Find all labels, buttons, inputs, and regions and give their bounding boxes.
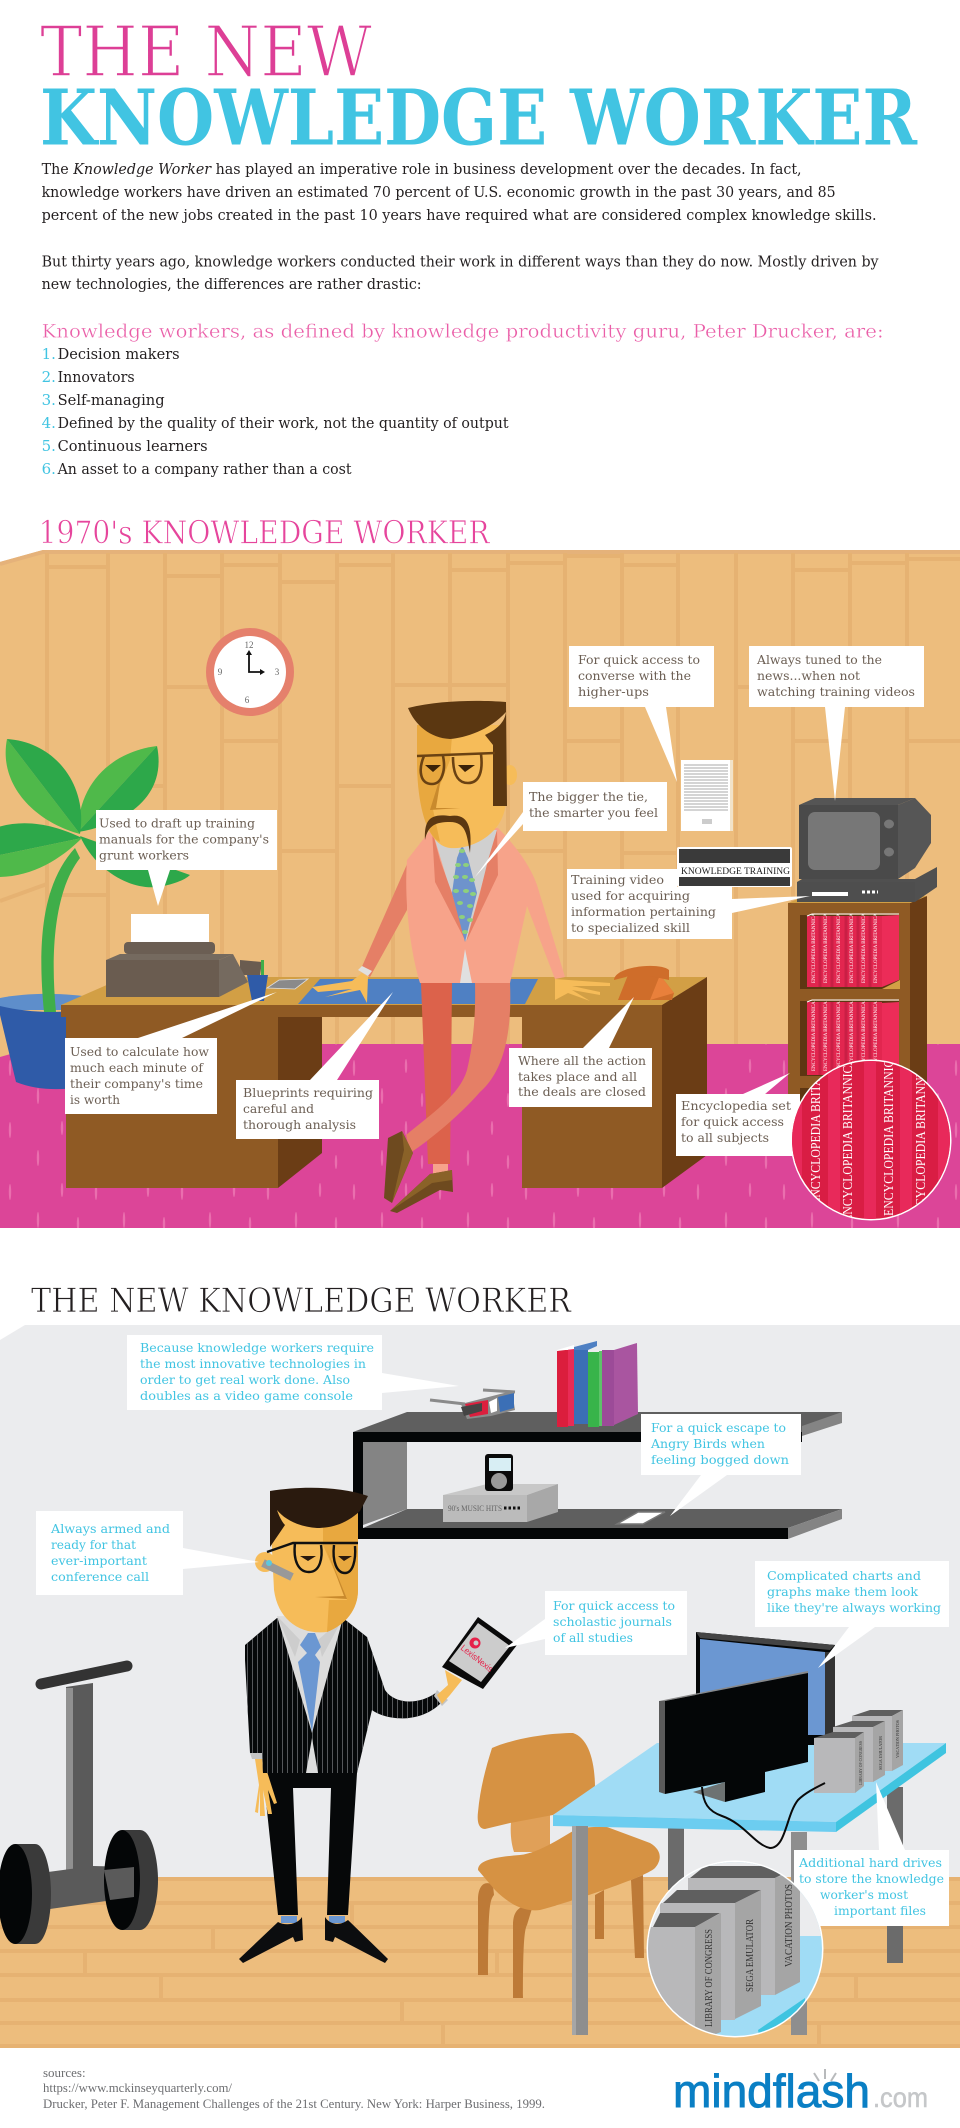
bookcase with encyclopedias: ENCYCLOPEDIA BRITANNICA [874, 913, 879, 983]
magnifier: encyclopedia spines: ENCYCLOPEDIA BRITANNICA [914, 1056, 929, 1222]
callout: video game console [127, 1335, 459, 1410]
callout: charts [755, 1561, 949, 1668]
wood floor [0, 1877, 960, 2047]
callout: typewriter: Used to draft up training [99, 816, 255, 830]
wall [0, 550, 960, 1057]
intro text: The Knowledge Worker has played an imperative role in business development over the decades. In fact, [42, 160, 802, 178]
callout: phone: the deals are closed [518, 1084, 646, 1099]
callout: encyclopedia: to all subjects [681, 1130, 769, 1145]
callout: encyclopedia: for quick access [681, 1114, 784, 1129]
callout: intercom: For quick access to [578, 652, 700, 667]
icon: mp3 player and dock [443, 1454, 558, 1522]
magnifier: encyclopedia spines: ENCYCLOPEDIA BRITANNICA [841, 1056, 856, 1222]
icon: intercom [681, 760, 733, 831]
callout: blueprints: thorough analysis [243, 1117, 356, 1132]
callout: bluetooth headset [36, 1511, 259, 1595]
title: THE NEW [40, 11, 372, 93]
sources: sources: [43, 2065, 86, 2080]
callout: smartphone: feeling bogged down [651, 1452, 789, 1467]
intro text: new technologies, the differences are rather drastic: [42, 275, 422, 293]
callout: phone [509, 997, 652, 1107]
numbered list: Defined by the quality of their work, not the quantity of output [58, 414, 509, 432]
callout: encyclopedia: Encyclopedia set [681, 1098, 791, 1113]
bookcase with encyclopedias: ENCYCLOPEDIA BRITANNICA [850, 913, 855, 983]
numbered list: 2. [42, 368, 56, 386]
worker modern figure [239, 1488, 517, 1963]
icon: blue monitor [696, 1632, 835, 1745]
heading: new worker: THE NEW KNOWLEDGE WORKER [31, 1281, 572, 1321]
numbered list: Decision makers [58, 345, 180, 363]
callout: charts: like they're always working [767, 1600, 941, 1615]
callout: calculator: Used to calculate how [70, 1044, 209, 1059]
callout: tablet: scholastic journals [553, 1614, 672, 1629]
standing leg [421, 983, 452, 1174]
tie [298, 1633, 321, 1732]
hand with tablet [437, 1617, 517, 1704]
callout: tie: the smarter you feel [529, 805, 658, 820]
callout: video game console: the most innovative technologies in [140, 1356, 366, 1371]
hard drives: LIBRARY OF CONGRESS [858, 1741, 863, 1785]
subheading: definition: Knowledge workers, as defined by knowledge productivity guru, Peter Drucker, are: [42, 320, 884, 342]
callout: bluetooth headset: Always armed and [50, 1521, 170, 1536]
numbered list: 1. [42, 345, 56, 363]
bookcase with encyclopedias: ENCYCLOPEDIA BRITANNICA [874, 1001, 879, 1071]
magnifier: encyclopedia spines: ENCYCLOPEDIA BRITANNICA [809, 1039, 824, 1205]
desk [61, 977, 707, 1188]
hand with tablet: LexisNexis [459, 1643, 495, 1674]
magnifier: encyclopedia spines: ENCYCLOPEDIA BRITANNICA [882, 1050, 897, 1216]
callout: encyclopedia [676, 1073, 800, 1156]
callout: video game console: doubles as a video game console [140, 1388, 353, 1403]
numbered list: 4. [42, 414, 56, 432]
callout: smartphone [641, 1414, 801, 1516]
heading: 1970s: 1970's KNOWLEDGE WORKER [39, 516, 491, 552]
callout: blueprints: careful and [243, 1101, 314, 1116]
icon: television [797, 798, 937, 902]
callout: training video: to specialized skill [571, 920, 690, 935]
callout: training video: Training video [571, 872, 664, 887]
pinstripe suit [245, 1616, 448, 1773]
callout: hard drives: Additional hard drives [798, 1855, 942, 1870]
icon: clock: 3 [275, 667, 280, 677]
callout: intercom: converse with the [578, 668, 691, 683]
callout: calculator: much each minute of [70, 1060, 204, 1075]
bookcase with encyclopedias: ENCYCLOPEDIA BRITANNICA [837, 1001, 842, 1071]
icon: clock [206, 628, 294, 716]
glass desk [553, 1743, 946, 2035]
callout: tie: The bigger the tie, [529, 789, 648, 804]
numbered list: Self-managing [58, 391, 165, 409]
callout: hard drives [794, 1782, 949, 1926]
logo: mindflash: .com [873, 2082, 928, 2113]
video box: knowledge training [677, 847, 792, 887]
bookcase with encyclopedias [788, 896, 927, 1150]
callout: training video: used for acquiring [571, 888, 690, 903]
callout: hard drives: important files [834, 1903, 926, 1918]
bookcase with encyclopedias: ENCYCLOPEDIA BRITANNICA [824, 913, 829, 983]
cable [702, 1783, 825, 1848]
numbered list: 5. [42, 437, 56, 455]
icon: mp3 player and dock: 90's MUSIC HITS [448, 1504, 502, 1513]
hanging hand [255, 1759, 277, 1816]
numbered list [42, 345, 509, 478]
numbered list: 6. [42, 460, 56, 478]
callout: intercom [569, 646, 714, 782]
magnifier: hard drives [640, 1860, 825, 2042]
numbered list: Continuous learners [58, 437, 208, 455]
video box: knowledge training: KNOWLEDGE TRAINING [681, 866, 791, 876]
hard drives [814, 1710, 903, 1793]
bookcase with encyclopedias: ENCYCLOPEDIA BRITANNICA [824, 1001, 829, 1071]
callout: video game console: order to get real work done. Also [140, 1372, 350, 1387]
back wall [0, 1325, 960, 1877]
callout: intercom: higher-ups [578, 684, 649, 699]
bookcase with encyclopedias: ENCYCLOPEDIA BRITANNICA [862, 1001, 867, 1071]
bookcase with encyclopedias: ENCYCLOPEDIA BRITANNICA [850, 1001, 855, 1071]
callout: training video: information pertaining [571, 904, 716, 919]
icon: black monitor [659, 1671, 808, 1802]
hands [312, 973, 610, 1003]
numbered list: An asset to a company rather than a cost [57, 460, 352, 478]
numbered list: 3. [42, 391, 56, 409]
icon: clock: 6 [245, 695, 250, 705]
icon: calculator [267, 979, 308, 989]
callout: tablet: For quick access to [553, 1598, 675, 1613]
callout: typewriter: grunt workers [99, 848, 189, 863]
head [408, 701, 517, 853]
icon: desk phone [614, 966, 674, 1000]
logo: mindflash: mindflash [673, 2065, 870, 2117]
crossed leg [406, 983, 510, 1153]
intro text [42, 160, 879, 293]
sources: https://www.mckinseyquarterly.com/ [43, 2080, 232, 2095]
icon: potted plant [0, 739, 190, 1089]
hard drives: SEGA EMULATOR [878, 1736, 883, 1770]
shoes [384, 1131, 453, 1213]
icon: smartphone [617, 1512, 665, 1524]
trousers [263, 1773, 357, 1915]
icon: books [557, 1341, 638, 1427]
callout: calculator [65, 992, 277, 1114]
callout: television [749, 646, 924, 801]
shoes [239, 1917, 388, 1963]
icon: typewriter [106, 914, 262, 997]
intro text: knowledge workers have driven an estimated 70 percent of U.S. economic growth in the past 30 years, and 85 [42, 183, 836, 201]
callout: blueprints: Blueprints requiring [243, 1085, 373, 1100]
wall shelves [353, 1412, 842, 1539]
intro text: percent of the new jobs created in the past 10 years have required what are considered complex knowledge skills. [42, 206, 877, 224]
magnifier: hard drives: VACATION PHOTOS [783, 1884, 795, 1967]
callout: phone: Where all the action [518, 1053, 646, 1068]
callout: hard drives: to store the knowledge [799, 1871, 944, 1886]
icon: pencil cup [247, 960, 268, 1001]
callout: video game console: Because knowledge workers require [140, 1340, 374, 1355]
panel: modern office scene [0, 1325, 960, 2047]
carpet [0, 1044, 960, 1228]
callout: charts: Complicated charts and [767, 1568, 921, 1583]
intro text: But thirty years ago, knowledge workers conducted their work in different ways than they do now. Mostly driven by [42, 252, 879, 270]
tie [452, 845, 477, 942]
callout: calculator: is worth [70, 1092, 120, 1107]
callout: tablet: of all studies [553, 1630, 633, 1645]
bookcase with encyclopedias: ENCYCLOPEDIA BRITANNICA [837, 913, 842, 983]
callout: television: watching training videos [757, 684, 915, 699]
jacket [358, 828, 565, 983]
head [255, 1488, 368, 1632]
callout: smartphone: For a quick escape to [651, 1420, 786, 1435]
magnifier: encyclopedia spines [792, 1060, 952, 1220]
numbered list: Innovators [58, 368, 135, 386]
icon: segway [0, 1666, 158, 1944]
bookcase with encyclopedias: ENCYCLOPEDIA BRITANNICA [812, 1001, 817, 1071]
callout: bluetooth headset: ready for that [51, 1537, 136, 1552]
magnifier: hard drives: LIBRARY OF CONGRESS [703, 1929, 715, 2027]
bookcase with encyclopedias: ENCYCLOPEDIA BRITANNICA [812, 913, 817, 983]
sources: Drucker, Peter F. Management Challenges of the 21st Century. New York: Harper Business, 1999. [43, 2096, 545, 2111]
magnifier: hard drives: SEGA EMULATOR [744, 1918, 756, 1992]
icon: 3d glasses [430, 1390, 515, 1419]
callout: bluetooth headset: ever-important [51, 1553, 147, 1568]
callout: calculator: their company's time [70, 1076, 203, 1091]
callout: tie [475, 782, 667, 877]
callout: typewriter: manuals for the company's [99, 832, 269, 847]
callout: training video [567, 869, 810, 939]
callout: television: news...when not [757, 668, 860, 683]
icon: clock: 9 [218, 667, 223, 677]
callout: blueprints [236, 992, 393, 1139]
panel: 1970s office scene [0, 550, 960, 1228]
bookcase with encyclopedias: ENCYCLOPEDIA BRITANNICA [862, 913, 867, 983]
callout: hard drives: worker's most [820, 1887, 908, 1902]
worker 1970s figure [312, 701, 610, 1213]
callout: television: Always tuned to the [756, 652, 882, 667]
hard drives: VACATION PHOTOS [895, 1720, 900, 1758]
sources [43, 2065, 545, 2111]
socks [281, 1916, 345, 1923]
chair [478, 1733, 660, 1998]
callout: typewriter [96, 810, 277, 906]
icon: clock: 12 [244, 640, 254, 650]
title [40, 11, 918, 164]
callout: smartphone: Angry Birds when [650, 1436, 765, 1451]
callout: bluetooth headset: conference call [51, 1569, 149, 1584]
callout: tablet [505, 1591, 687, 1655]
callout: phone: takes place and all [518, 1069, 637, 1084]
callout: charts: graphs make them look [767, 1584, 918, 1599]
